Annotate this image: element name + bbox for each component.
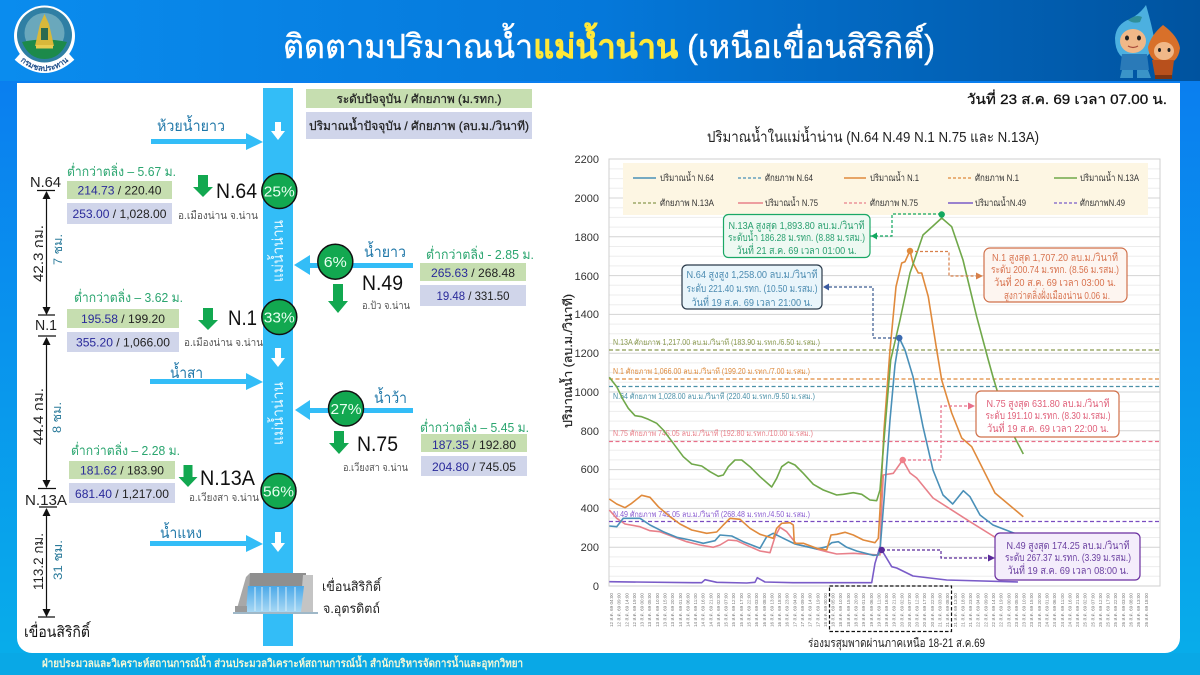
x axis date labels: 23 ส.ค. 69 20:00 [1037, 593, 1042, 627]
badge 27% [328, 391, 364, 426]
x axis date labels: 18 ส.ค. 69 10:00 [838, 593, 843, 627]
tributary: Nam Sa: น้ำสา [170, 362, 203, 382]
callout: N.13A peak: N.13A สูงสุด 1,893.80 ลบ.ม./วินาที [728, 219, 865, 232]
x axis date labels: 13 ส.ค. 69 15:00 [662, 593, 668, 627]
series N.13A [609, 218, 1023, 501]
x axis date labels [609, 593, 1149, 627]
badge 33%: 33% [264, 310, 295, 326]
callout: N.49 peak: ระดับ 267.37 ม.รทก. (3.39 ม.รสม.) [1005, 552, 1131, 564]
x axis date labels: 25 ส.ค. 69 17:00 [1106, 593, 1111, 627]
station N.75 on Nam Wa: น้ำว้า [374, 387, 407, 407]
x axis date labels: 23 ส.ค. 69 15:00 [1029, 593, 1034, 627]
badge 25%: 25% [264, 184, 295, 200]
x axis date labels: 14 ส.ค. 69 21:00 [708, 593, 713, 627]
label N.1: N.1 [35, 317, 57, 334]
x axis date labels: 21 ส.ค. 69 13:00 [953, 593, 958, 627]
percent badges [261, 174, 364, 508]
legend [623, 163, 1148, 215]
station N.1: ต่ำกว่าตลิ่ง – 3.62 ม. [74, 289, 183, 305]
x axis date labels: 13 ส.ค. 69 00:00 [640, 593, 645, 627]
station N.13A [69, 442, 259, 504]
tributary: Huai Nam Yao: ห้วยน้ำยาว [157, 115, 225, 135]
callout: N.1 peak [907, 248, 1127, 302]
y axis labels: 2200 [575, 154, 599, 166]
x axis date labels: 23 ส.ค. 69 05:00 [1014, 593, 1019, 627]
callout: N.1 peak: ระดับ 200.74 ม.รทก. (8.56 ม.รสม.) [991, 264, 1119, 276]
x axis date labels: 20 ส.ค. 69 12:00 [915, 593, 920, 627]
x axis date labels: 24 ส.ค. 69 21:00 [1075, 593, 1080, 627]
y axis labels: 2000 [575, 193, 599, 205]
flow arrows in river [271, 122, 285, 552]
tributary: Nam Haeng [150, 522, 263, 552]
series N.64 [609, 338, 1020, 555]
x axis date labels: 14 ส.ค. 69 06:00 [685, 593, 690, 627]
tributary: Huai Nam Yao [151, 115, 263, 150]
station N.75 on Nam Wa: อ.เวียงสา จ.น่าน [343, 461, 408, 474]
x axis date labels: 18 ส.ค. 69 00:00 [823, 593, 828, 627]
callout: N.64 peak: วันที่ 19 ส.ค. 69 เวลา 21:00 น. [692, 295, 812, 309]
y axis labels: 0 [593, 581, 599, 593]
station N.64: ต่ำกว่าตลิ่ง – 5.67 ม. [67, 163, 176, 179]
x axis date labels: 25 ส.ค. 69 22:00 [1113, 593, 1118, 627]
x axis date labels: 20 ส.ค. 69 22:00 [930, 593, 935, 627]
x axis date labels: 14 ส.ค. 69 01:00 [678, 593, 683, 627]
legend: ปริมาณน้ำ N.1 [870, 171, 919, 184]
x axis date labels: 18 ส.ค. 69 15:00 [846, 593, 851, 627]
y axis labels: 800 [581, 426, 599, 438]
logo: Royal Irrigation Department seal [14, 6, 75, 73]
callout: N.13A peak: วันที่ 21 ส.ค. 69 เวลา 01:00 น. [736, 243, 856, 257]
y axis labels: 200 [581, 542, 599, 554]
x axis date labels: 23 ส.ค. 69 00:00 [1006, 593, 1011, 627]
time 8 hr: 8 ชม. [50, 402, 64, 433]
callout: N.1 peak: วันที่ 20 ส.ค. 69 เวลา 03:00 น. [994, 275, 1116, 289]
x axis date labels: 26 ส.ค. 69 18:00 [1144, 593, 1149, 627]
callout: N.13A peak [724, 211, 945, 258]
callout: N.1 peak: สูงกว่าตลิ่งฝั่งเมืองน่าน 0.06 ม. [1004, 288, 1110, 302]
callout: N.1 peak: N.1 สูงสุด 1,707.20 ลบ.ม./วินาที [992, 251, 1118, 264]
capacity labels [613, 338, 820, 519]
legend: ศักยภาพ N.64 [765, 173, 813, 184]
series N.1 [609, 251, 1023, 550]
river schematic [263, 88, 293, 646]
station N.13A: อ.เวียงสา จ.น่าน [189, 491, 259, 504]
x axis date labels: 24 ส.ค. 69 01:00 [1044, 593, 1050, 627]
callout: N.64 peak: N.64 สูงสูง 1,258.00 ลบ.ม./วินาที [686, 268, 818, 281]
x axis date labels: 13 ส.ค. 69 05:00 [647, 593, 652, 627]
x axis date labels: 25 ส.ค. 69 12:00 [1098, 593, 1103, 627]
x axis date labels: 16 ส.ค. 69 18:00 [777, 593, 782, 627]
time 7 hr: 7 ชม. [51, 234, 65, 265]
key: level and flow: ระดับปัจจุบัน / ศักยภาพ (ม.รทก.) [336, 92, 502, 107]
x axis date labels: 12 ส.ค. 69 09:00 [617, 593, 622, 627]
distance 42.3 km: 42.3 กม. [30, 225, 46, 282]
x axis date labels: 17 ส.ค. 69 14:00 [808, 593, 813, 627]
capacity lines [609, 350, 1160, 522]
capacity labels: N.49 ศักยภาพ 745.05 ลบ.ม./วินาที (268.48 ม.รทก./4.50 ม.รสม.) [613, 510, 810, 519]
badge 56%: 56% [263, 484, 294, 500]
y axis labels: 1800 [575, 232, 599, 244]
station N.75 on Nam Wa: N.75 [357, 433, 398, 456]
station N.49 on Nam Yao: อ.ปัว จ.น่าน [362, 300, 410, 312]
station N.13A: ต่ำกว่าตลิ่ง – 2.28 ม. [71, 442, 180, 458]
y axis labels: 1200 [575, 348, 599, 360]
y axis title: ปริมาณน้ำ (ลบ.ม./วินาที) [559, 294, 575, 428]
key: level and flow [306, 89, 532, 139]
station N.1 [67, 289, 263, 352]
label N.64: N.64 [30, 174, 61, 191]
x axis date labels: 21 ส.ค. 69 23:00 [968, 593, 973, 627]
time 31 hr: 31 ชม. [51, 540, 65, 580]
x axis date labels: 16 ส.ค. 69 13:00 [769, 593, 774, 627]
capacity labels: N.75 ศักยภาพ 745.05 ลบ.ม./วินาที (192.80 ม.รทก./10.00 ม.รสม.) [613, 429, 813, 438]
station N.49 on Nam Yao: N.49 [362, 272, 403, 295]
x axis date labels: 16 ส.ค. 69 03:00 [754, 593, 759, 627]
y axis labels: 1000 [575, 387, 599, 399]
river channel [263, 88, 293, 646]
x axis date labels: 15 ส.ค. 69 17:00 [739, 593, 744, 627]
station N.64 [67, 163, 258, 224]
x axis date labels: 17 ส.ค. 69 04:00 [792, 593, 797, 627]
x axis date labels: 24 ส.ค. 69 06:00 [1052, 593, 1057, 627]
x axis date labels: 26 ส.ค. 69 03:00 [1121, 593, 1126, 627]
y axis labels: 1600 [575, 271, 599, 283]
date stamp: วันที่ 23 ส.ค. 69 เวลา 07.00 น. [967, 90, 1167, 107]
station N.64: 253.00 / 1,028.00 [72, 207, 167, 221]
mascots: water drop characters [1115, 5, 1180, 79]
callout: N.75 peak [900, 391, 1119, 463]
x axis date labels: 19 ส.ค. 69 06:00 [869, 593, 874, 627]
callout: N.75 peak: N.75 สูงสุด 631.80 ลบ.ม./วินาที [986, 397, 1110, 410]
distance scale [24, 174, 92, 641]
x axis date labels: 15 ส.ค. 69 22:00 [746, 593, 752, 627]
legend: ศักยภาพN.49 [1080, 198, 1125, 209]
key: level and flow: ปริมาณน้ำปัจจุบัน / ศักยภาพ (ลบ.ม./วินาที) [309, 117, 529, 134]
legend: ศักยภาพ N.1 [975, 173, 1019, 184]
y axis labels: 1400 [575, 309, 599, 321]
x axis date labels: 21 ส.ค. 69 18:00 [960, 593, 965, 627]
y axis labels: 400 [581, 503, 599, 515]
tributary: Nam Sa [150, 362, 263, 390]
series N.49 [609, 547, 1018, 583]
callout: N.64 peak: ระดับ 221.40 ม.รทก. (10.50 ม.รสม.) [686, 283, 818, 295]
monsoon trough caption: ร่องมรสุมพาดผ่านภาคเหนือ 18-21 ส.ค.69 [808, 636, 985, 651]
callout: N.49 peak: วันที่ 19 ส.ค. 69 เวลา 08:00 น. [1008, 563, 1128, 577]
station N.75 on Nam Wa [295, 387, 529, 476]
monsoon trough highlight box [830, 586, 952, 632]
x axis date labels: 12 ส.ค. 69 04:00 [609, 593, 614, 627]
station N.75 on Nam Wa: ต่ำกว่าตลิ่ง – 5.45 ม. [420, 419, 529, 435]
station N.13A: N.13A [200, 467, 255, 490]
x axis date labels: 22 ส.ค. 69 14:00 [991, 593, 996, 627]
x axis date labels: 21 ส.ค. 69 08:00 [945, 593, 950, 627]
station N.64: อ.เมืองน่าน จ.น่าน [178, 209, 258, 222]
badge 25% [262, 174, 297, 208]
x axis date labels: 25 ส.ค. 69 02:00 [1083, 593, 1088, 627]
x axis date labels: 21 ส.ค. 69 03:00 [938, 593, 942, 627]
x axis date labels: 17 ส.ค. 69 19:00 [815, 593, 820, 627]
x axis date labels: 22 ส.ค. 69 19:00 [999, 593, 1004, 627]
station N.1: N.1 [228, 307, 257, 330]
badge 6% [318, 244, 353, 279]
x axis date labels: 17 ส.ค. 69 09:00 [800, 593, 805, 627]
badge 27%: 27% [330, 401, 362, 418]
station N.75 on Nam Wa: 187.35 / 192.80 [432, 438, 516, 452]
badge 6%: 6% [324, 254, 347, 271]
x axis date labels: 18 ส.ค. 69 05:00 [831, 593, 836, 627]
badge 33% [262, 300, 297, 334]
x axis date labels: 16 ส.ค. 69 23:00 [785, 593, 790, 627]
dam name: จ.อุตรดิตถ์ [323, 601, 380, 617]
x axis date labels: 13 ส.ค. 69 20:00 [670, 593, 675, 627]
x axis date labels: 24 ส.ค. 69 16:00 [1067, 593, 1072, 627]
x axis date labels: 20 ส.ค. 69 17:00 [922, 593, 927, 627]
x axis date labels: 24 ส.ค. 69 11:00 [1060, 593, 1065, 627]
x axis date labels: 26 ส.ค. 69 13:00 [1136, 593, 1141, 627]
dam name [322, 577, 383, 617]
capacity labels: N.64 ศักยภาพ 1,028.00 ลบ.ม./วินาที (220.40 ม.รทก./9.50 ม.รสม.) [613, 392, 815, 401]
footer band [0, 653, 1200, 675]
station N.75 on Nam Wa: 204.80 / 745.05 [432, 460, 516, 474]
legend: ปริมาณน้ำN.49 [975, 196, 1026, 209]
station N.49 on Nam Yao: 265.63 / 268.48 [431, 266, 515, 280]
station N.49 on Nam Yao: 19.48 / 331.50 [436, 289, 510, 303]
x axis date labels: 16 ส.ค. 69 08:00 [762, 593, 767, 627]
station N.49 on Nam Yao: น้ำยาว [364, 241, 406, 261]
callout: N.75 peak: ระดับ 191.10 ม.รทก. (8.30 ม.รสม.) [986, 410, 1110, 422]
station N.1: 195.58 / 199.20 [81, 312, 165, 326]
legend: ปริมาณน้ำ N.13A [1080, 171, 1140, 184]
x axis date labels: 22 ส.ค. 69 09:00 [983, 593, 988, 627]
station N.64: 214.73 / 220.40 [78, 184, 162, 198]
river name upper: แม่น้ำน่าน [267, 220, 287, 282]
badge 56% [261, 474, 296, 508]
capacity labels: N.1 ศักยภาพ 1,066.00 ลบ.ม./วินาที (199.20 ม.รทก./7.00 ม.รสม.) [613, 367, 810, 376]
distance 113.2 km: 113.2 กม. [30, 533, 46, 590]
station N.13A: 181.62 / 183.90 [80, 464, 164, 478]
x axis date labels: 20 ส.ค. 69 07:00 [907, 593, 912, 627]
station N.13A: 681.40 / 1,217.00 [75, 487, 169, 501]
x axis date labels: 19 ส.ค. 69 01:00 [861, 593, 866, 627]
tributary: Nam Haeng: น้ำแหง [160, 522, 202, 542]
station N.1: 355.20 / 1,066.00 [76, 336, 170, 350]
header band [0, 0, 1200, 81]
x axis date labels: 25 ส.ค. 69 07:00 [1090, 593, 1095, 627]
logo: Royal Irrigation Department seal: กรมชลประทาน [20, 58, 68, 72]
x axis date labels: 14 ส.ค. 69 16:00 [701, 593, 706, 627]
station N.49 on Nam Yao: ต่ำกว่าตลิ่ง - 2.85 ม. [426, 246, 534, 262]
legend: ศักยภาพ N.75 [870, 198, 918, 209]
x axis date labels: 15 ส.ค. 69 12:00 [731, 593, 736, 627]
x axis date labels: 14 ส.ค. 69 11:00 [693, 593, 698, 627]
legend: ปริมาณน้ำ N.75 [765, 196, 818, 209]
dam name: เขื่อนสิริกิติ์ [322, 577, 383, 594]
x axis date labels: 19 ส.ค. 69 21:00 [892, 593, 897, 627]
capacity labels: N.13A ศักยภาพ 1,217.00 ลบ.ม./วินาที (183.90 ม.รทก./6.50 ม.รสม.) [613, 338, 820, 347]
label N.13A: N.13A [25, 492, 67, 509]
callout: N.13A peak: ระดับน้ำ 186.28 ม.รทก. (8.88 ม.รสม.) [728, 230, 865, 244]
distance 44.4 km: 44.4 กม. [30, 388, 46, 445]
legend: ศักยภาพ N.13A [660, 198, 715, 209]
chart title: ปริมาณน้ำในแม่น้ำน่าน (N.64 N.49 N.1 N.75 และ N.13A) [707, 126, 1039, 146]
x axis date labels: 18 ส.ค. 69 20:00 [854, 593, 858, 627]
line chart: flow in Nan river [559, 154, 1160, 651]
x axis date labels: 12 ส.ค. 69 19:00 [632, 593, 637, 627]
x axis date labels: 22 ส.ค. 69 04:00 [976, 593, 981, 627]
dam illustration [233, 573, 318, 614]
station N.64: N.64 [216, 180, 257, 203]
title: ติดตามปริมาณน้ำแม่น้ำน่าน (เหนือเขื่อนสิริกิติ์) [283, 22, 935, 65]
legend: ปริมาณน้ำ N.64 [660, 171, 714, 184]
y axis labels: 600 [581, 464, 599, 476]
x axis date labels: 19 ส.ค. 69 16:00 [884, 593, 889, 627]
y axis labels [575, 154, 599, 593]
callout: N.49 peak: N.49 สูงสุด 174.25 ลบ.ม./วินาที [1006, 539, 1130, 552]
x axis date labels: 26 ส.ค. 69 08:00 [1128, 593, 1134, 627]
station N.1: อ.เมืองน่าน จ.น่าน [184, 336, 263, 349]
x axis date labels: 19 ส.ค. 69 11:00 [876, 593, 881, 627]
callout: N.49 peak [878, 533, 1140, 580]
x axis date labels: 15 ส.ค. 69 02:00 [716, 593, 721, 627]
series N.75 [609, 460, 1015, 555]
x axis date labels: 12 ส.ค. 69 14:00 [624, 593, 629, 627]
x axis date labels: 15 ส.ค. 69 07:00 [724, 593, 729, 627]
x axis date labels: 23 ส.ค. 69 10:00 [1022, 593, 1027, 627]
plot grid [609, 159, 1160, 586]
callout: N.64 peak [682, 265, 902, 341]
station N.49 on Nam Yao [294, 241, 534, 313]
x axis date labels: 20 ส.ค. 69 02:00 [899, 593, 904, 627]
footer credit: ฝ่ายประมวลและวิเคราะห์สถานการณ์น้ำ ส่วนประมวลวิเคราะห์สถานการณ์น้ำ สำนักบริหารจัดการน้ำและอุทกวิทยา [42, 655, 523, 671]
river name lower: แม่น้ำน่าน [267, 382, 287, 445]
label Sirikit dam: เขื่อนสิริกิติ์ [24, 621, 92, 641]
x axis date labels: 13 ส.ค. 69 10:00 [655, 593, 660, 627]
callout: N.75 peak: วันที่ 19 ส.ค. 69 เวลา 22:00 น. [987, 421, 1109, 435]
